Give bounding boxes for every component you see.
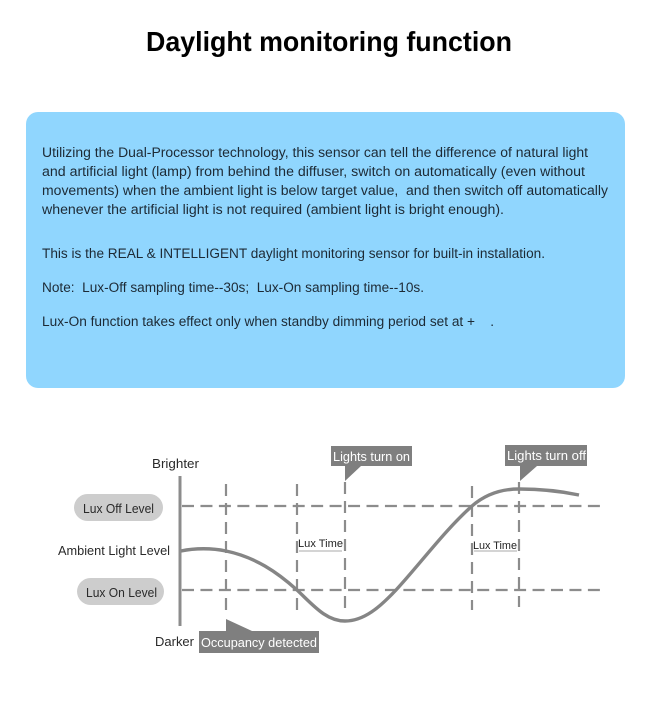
chart: ambient light level over time [58,445,600,653]
text block: main paragraph: whenever the artificial light is not required (ambient light is bright enough). [41,202,504,217]
lux on level pill: Lux On Level [86,586,157,600]
lux off level pill: Lux Off Level [83,502,154,516]
callout: lights turn off: Lights turn off [507,448,586,463]
text block: main paragraph [41,145,608,217]
label: brighter: Brighter [152,457,199,471]
lux off level pill [74,494,163,521]
title: Daylight monitoring function [146,26,512,57]
text block: main paragraph: movements) when the ambient light is below target value, and then switch off automatically [42,183,608,198]
lux off threshold line [182,505,600,507]
callout: lights turn on: Lights turn on [333,449,410,464]
callout: lights turn on [331,446,412,481]
time markers [226,482,519,617]
lux time annotation 1: Lux Time [298,538,343,550]
vertical axis [178,476,182,626]
lux on level pill [77,578,164,605]
text block: main paragraph: and artificial light (lamp) from behind the diffuser, switch on automatically (even without [42,164,585,179]
label: ambient light level: Ambient Light Level [58,544,170,558]
lux time annotation 2: Lux Time [473,540,517,552]
text block: lux-on condition: Lux-On function takes effect only when standby dimming period set at + . [42,314,494,329]
callout: occupancy detected [199,619,319,653]
text block: sampling time note: Note: Lux-Off sampling time--30s; Lux-On sampling time--10s. [42,280,424,295]
label: darker: Darker [155,635,194,649]
panel: description [26,112,625,388]
callout: lights turn off [505,445,587,481]
text block: real and intelligent statement: This is the REAL & INTELLIGENT daylight monitoring sensor for built-in installation. [42,246,545,261]
light level curve [181,489,579,621]
text block: main paragraph: Utilizing the Dual-Processor technology, this sensor can tell the difference of natural light [42,145,588,160]
callout: occupancy detected: Occupancy detected [201,635,317,650]
lux on threshold line [182,589,600,591]
